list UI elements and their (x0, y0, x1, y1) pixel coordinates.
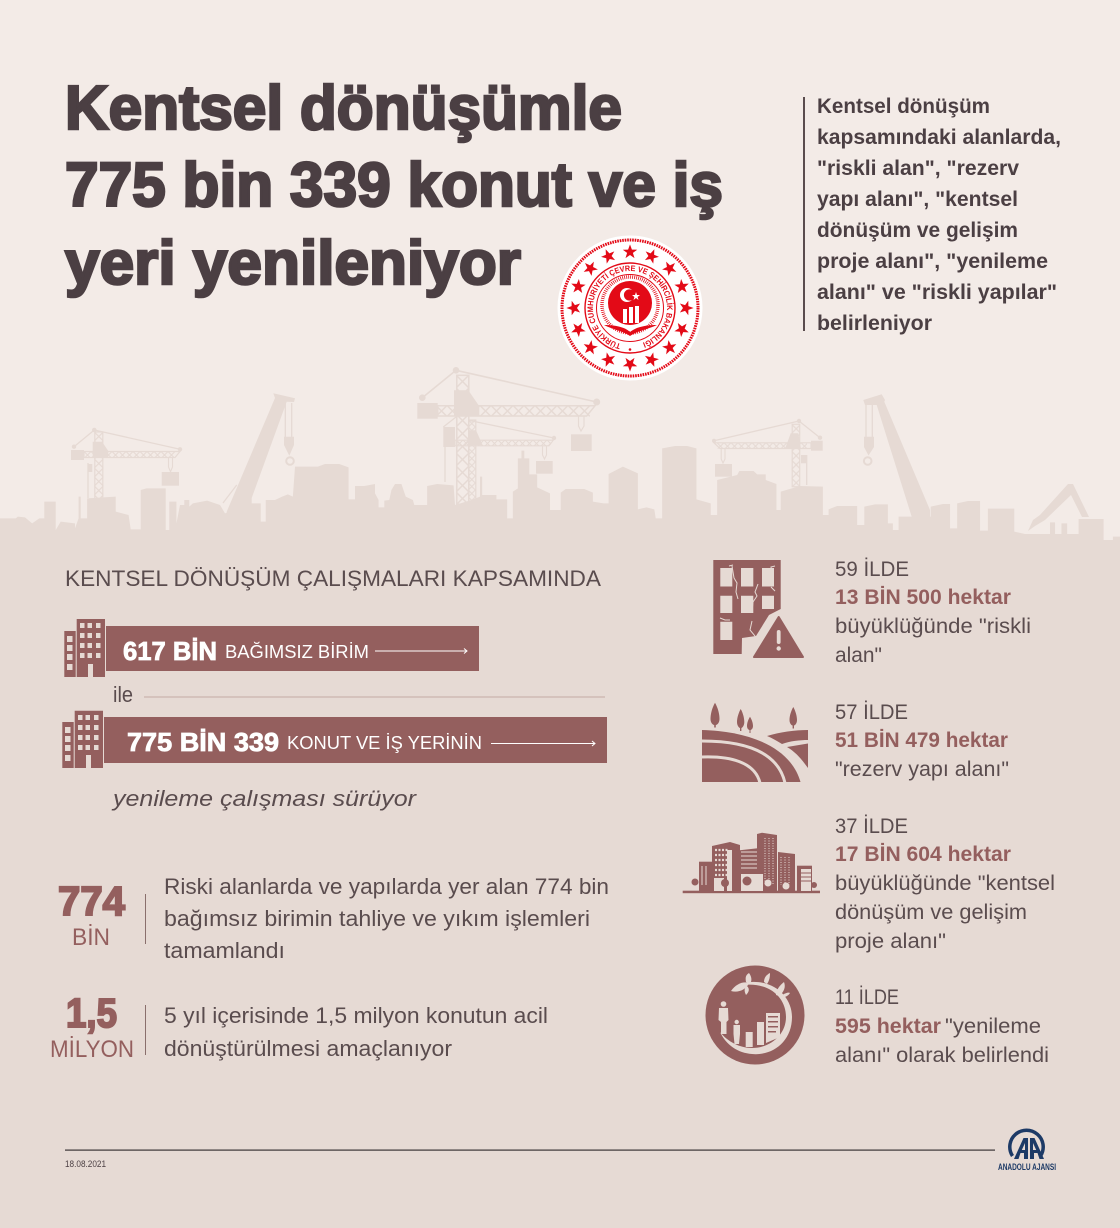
mobile crane: left (223, 393, 295, 515)
icon: city (683, 833, 820, 893)
side note: Kentsel dönüşüm (817, 95, 990, 118)
stat: 1,5 milyon (50, 990, 548, 1063)
icon: fields and trees (702, 703, 808, 783)
title: Kentsel dönüşümle (65, 74, 622, 143)
text: renewal note: yenileme çalışması sürüyor (111, 786, 418, 811)
mobile crane: right (863, 394, 930, 520)
text: yenileme alanı (835, 986, 1049, 1067)
crane: left (71, 428, 182, 515)
side note: proje alanı", "yenileme (817, 250, 1048, 273)
crane: central small (443, 417, 556, 502)
title: 775 bin 339 konut ve iş (65, 151, 723, 220)
side note: "riskli alan", "rezerv (817, 157, 1019, 180)
text: riskli alan (835, 558, 1031, 667)
bar: 775 bin 339: 775 BİN 339 (127, 727, 279, 757)
skyline silhouette (0, 446, 1120, 560)
excavator (1028, 484, 1089, 531)
logo: Anadolu Ajansı: ANADOLU AJANSI (998, 1162, 1056, 1172)
stat: 1,5 milyon: MİLYON (50, 1036, 134, 1063)
stat: 1,5 milyon: dönüştürülmesi amaçlanıyor (164, 1036, 452, 1061)
title (65, 74, 723, 298)
crane: central large (417, 367, 600, 505)
text: rezerv yapı alanı: 51 BİN 479 hektar (835, 729, 1008, 752)
stat: 774 bin: 774 (58, 878, 125, 924)
text: kentsel dönüşüm ve gelişim: proje alanı" (835, 930, 946, 953)
stat: 1,5 milyon: 5 yıl içerisinde 1,5 milyon konutun acil (164, 1003, 548, 1028)
stat: 774 bin (58, 874, 609, 963)
side note: kapsamındaki alanlarda, (817, 126, 1061, 149)
text: kentsel dönüşüm ve gelişim: 17 BİN 604 hektar (835, 843, 1011, 866)
side note: belirleniyor (817, 312, 932, 335)
title: yeri yenileniyor (65, 229, 521, 298)
stat: 774 bin: Riski alanlarda ve yapılarda yer alan 774 bin (164, 874, 609, 899)
text: riskli alan: 59 İLDE (835, 558, 909, 581)
text: rezerv yapı alanı: "rezerv yapı alanı" (835, 758, 1009, 781)
text: kentsel dönüşüm ve gelişim: dönüşüm ve gelişim (835, 901, 1027, 924)
side note: alanı" ve "riskli yapılar" (817, 281, 1057, 304)
lower section background (0, 540, 1120, 1228)
ministry seal: TÜRKİYE CUMHURİYETİ ÇEVRE VE ŞEHİRCİLİK BAKANLIĞI (587, 265, 674, 350)
ministry seal (558, 236, 702, 380)
text: yenileme alanı: alanı" olarak belirlendi (835, 1044, 1049, 1067)
bar: 617 bin (106, 626, 479, 671)
section heading: KENTSEL DÖNÜŞÜM ÇALIŞMALARI KAPSAMINDA (65, 566, 601, 591)
side note: dönüşüm ve gelişim (817, 219, 1018, 242)
text: kentsel dönüşüm ve gelişim: 37 İLDE (835, 815, 908, 838)
text: yenileme alanı: 11 İLDE (835, 986, 899, 1009)
stat: 774 bin: BİN (72, 924, 110, 951)
logo: Anadolu Ajansı (998, 1130, 1056, 1172)
text: yenileme alanı: "yenileme (945, 1015, 1041, 1038)
text: rezerv yapı alanı (835, 701, 1009, 781)
icon: building 1 (64, 619, 105, 677)
stat: 774 bin: bağımsız birimin tahliye ve yıkım işlemleri (164, 906, 590, 931)
text: riskli alan: 13 BİN 500 hektar (835, 586, 1011, 609)
bar: 775 bin 339: KONUT VE İŞ YERİNİN (287, 733, 482, 753)
bar: 617 bin: BAĞIMSIZ BİRİM (225, 641, 369, 662)
connector: ile: ile (113, 682, 133, 707)
text: yenileme alanı: 595 hektar (835, 1015, 941, 1038)
text: rezerv yapı alanı: 57 İLDE (835, 701, 908, 724)
bar: 617 bin: 617 BİN (123, 636, 217, 666)
bar: 775 bin 339 (104, 717, 607, 763)
text: riskli alan: alan" (835, 644, 882, 667)
stat: 1,5 milyon: 1,5 (66, 990, 117, 1036)
stat: 774 bin: tamamlandı (164, 938, 285, 963)
text: kentsel dönüşüm ve gelişim: büyüklüğünde "kentsel (835, 872, 1055, 895)
icon: building 2 (62, 711, 103, 768)
icon: cracked building with warning (713, 560, 803, 657)
icon: renewal circle (706, 966, 804, 1064)
crane: right (712, 419, 823, 487)
text: kentsel dönüşüm ve gelişim (835, 815, 1055, 953)
side note (803, 95, 1061, 335)
side note: yapı alanı", "kentsel (817, 188, 1018, 211)
text: riskli alan: büyüklüğünde "riskli (835, 615, 1031, 638)
footer rule and date: 18.08.2021 (65, 1159, 106, 1169)
